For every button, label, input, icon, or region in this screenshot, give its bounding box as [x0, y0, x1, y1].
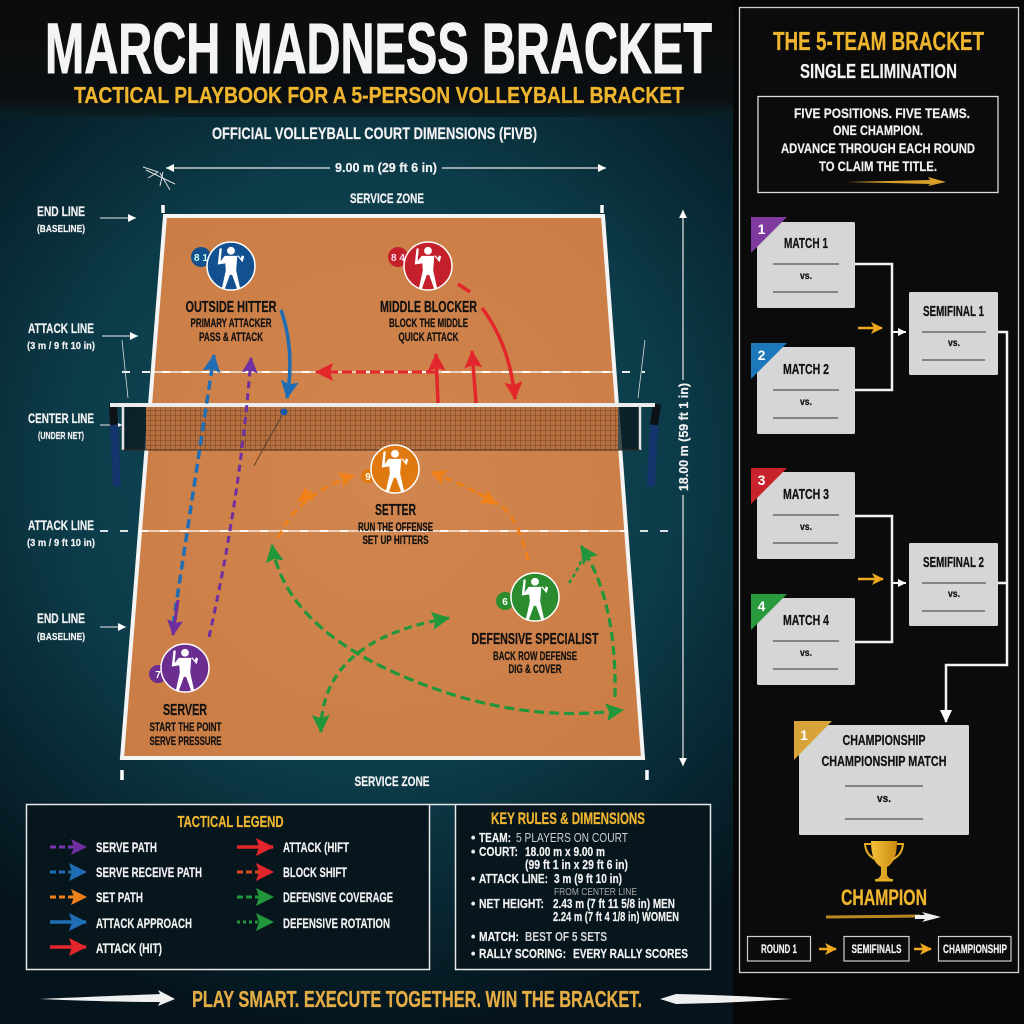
- rules text: 5 PLAYERS ON COURT: [516, 831, 628, 845]
- match 2 card: vs.: [800, 396, 812, 408]
- advance arrow one: [858, 327, 882, 329]
- semifinals tag: [844, 936, 909, 961]
- left line labels: END LINE: [37, 611, 85, 626]
- arrow: block shift: [316, 370, 436, 374]
- match 1 card: MATCH 1: [784, 235, 828, 252]
- player: defensive specialist: [472, 573, 599, 676]
- semifinal 2 card: vs.: [948, 588, 960, 600]
- player: outside hitter: PRIMARY ATTACKER: [190, 316, 272, 330]
- match 4 card: vs.: [800, 647, 812, 659]
- rules heading: KEY RULES & DIMENSIONS: [491, 809, 645, 828]
- player: setter: SETTER: [375, 502, 416, 519]
- championship card: CHAMPIONSHIP MATCH: [822, 753, 946, 770]
- legend labels: ATTACK APPROACH: [96, 915, 192, 931]
- arrow: set path right: [431, 472, 528, 560]
- player: defensive specialist: DEFENSIVE SPECIALIST: [472, 631, 599, 648]
- arrow: set path left head: [298, 492, 312, 501]
- player: outside hitter: [186, 242, 277, 344]
- player: setter: SET UP HITTERS: [362, 533, 428, 547]
- rules text: •: [471, 872, 475, 886]
- service zone bottom label: SERVICE ZONE: [354, 773, 430, 789]
- semifinal 2 card: [909, 543, 998, 626]
- player: server: 7: [155, 670, 161, 681]
- rules text: 3 m (9 ft 10 in): [554, 872, 622, 886]
- rules text: BEST OF 5 SETS: [525, 930, 607, 944]
- rules text: •: [471, 897, 475, 911]
- player: middle blocker: [380, 242, 477, 344]
- panel: bracket frame: [740, 8, 1018, 972]
- rules text: TEAM:: [479, 831, 511, 845]
- left line labels: CENTER LINE: [28, 411, 94, 426]
- intro box: [758, 96, 998, 192]
- rules text: 18.00 m x 9.00 m: [525, 845, 605, 859]
- championship card: [794, 721, 969, 835]
- championship card: CHAMPIONSHIP: [842, 732, 926, 749]
- right panel background: [733, 0, 1024, 1024]
- match 3 card: vs.: [800, 521, 812, 533]
- left line labels: (BASELINE): [37, 223, 85, 235]
- semifinal 1 card: SEMIFINAL 1: [923, 303, 984, 320]
- player: defensive specialist: BACK ROW DEFENSE: [493, 649, 577, 663]
- player: outside hitter: 8 1: [194, 253, 208, 264]
- legend keys: [50, 847, 273, 947]
- footer left brush arrow: [40, 990, 175, 1006]
- left line labels: (BASELINE): [37, 631, 85, 643]
- player: server: SERVE PRESSURE: [150, 734, 222, 748]
- title: MARCH MADNESS BRACKET: [45, 10, 712, 89]
- rules text: NET HEIGHT:: [479, 897, 544, 911]
- arrow: serve receive path: [173, 355, 214, 625]
- header band: [0, 0, 733, 117]
- championship tag: [938, 936, 1011, 961]
- arrow: defensive rotation short: [569, 552, 585, 583]
- brush arrow: [845, 177, 946, 186]
- semifinal 2 card: SEMIFINAL 2: [923, 554, 984, 571]
- net: [110, 404, 657, 486]
- bracket connectors: [855, 264, 1007, 722]
- left line labels: END LINE: [37, 204, 85, 219]
- left line labels: ATTACK LINE: [28, 518, 94, 533]
- legend labels: ATTACK (HIT): [96, 940, 162, 956]
- player: middle blocker: 8 4: [391, 253, 405, 264]
- tactical arrows: [173, 284, 623, 732]
- arrow: set path left: [278, 475, 354, 538]
- ball: [280, 408, 288, 416]
- arrow: attack hit one: [436, 354, 438, 403]
- player: server: START THE POINT: [150, 720, 222, 734]
- legend labels: SET PATH: [96, 889, 143, 905]
- court length dimension: 18.00 m (59 ft 1 in): [676, 383, 691, 491]
- player: outside hitter: PASS & ATTACK: [199, 330, 263, 344]
- player: setter: [358, 445, 433, 547]
- arrow: defensive rotation: [321, 618, 449, 732]
- rules text: (99 ft 1 in x 29 ft 6 in): [525, 858, 628, 872]
- player: middle blocker: MIDDLE BLOCKER: [380, 299, 477, 316]
- legend labels: DEFENSIVE ROTATION: [283, 915, 390, 931]
- subtitle: TACTICAL PLAYBOOK FOR A 5-PERSON VOLLEYBALL BRACKET: [74, 82, 684, 108]
- footer slogan: PLAY SMART. EXECUTE TOGETHER. WIN THE BRACKET.: [192, 986, 642, 1012]
- arrow: set path right head: [478, 493, 496, 504]
- player: middle blocker: BLOCK THE MIDDLE: [389, 316, 468, 330]
- match 1 card: [751, 217, 855, 308]
- icon: trophy: [865, 841, 903, 882]
- player: server: SERVER: [163, 702, 207, 719]
- champion brush arrow: [826, 912, 941, 922]
- player: middle blocker: QUICK ATTACK: [398, 330, 459, 344]
- net rope scribble: [143, 167, 175, 190]
- rules text: ATTACK LINE:: [479, 872, 548, 886]
- left line labels: ATTACK LINE: [28, 321, 94, 336]
- legend labels: DEFENSIVE COVERAGE: [283, 889, 393, 905]
- player: outside hitter: OUTSIDE HITTER: [186, 299, 277, 316]
- intro box: TO CLAIM THE TITLE.: [819, 158, 937, 174]
- match 4 card: MATCH 4: [783, 612, 829, 629]
- match 3 card: MATCH 3: [783, 486, 829, 503]
- rules text: EVERY RALLY SCORES: [573, 947, 688, 961]
- rules text: •: [471, 930, 475, 944]
- match 2 card: MATCH 2: [783, 361, 829, 378]
- arrow: defensive coverage long: [272, 545, 623, 713]
- semifinals tag: SEMIFINALS: [852, 942, 902, 956]
- court dimensions heading: OFFICIAL VOLLEYBALL COURT DIMENSIONS (FIVB): [212, 124, 537, 143]
- rules text: RALLY SCORING:: [479, 947, 566, 961]
- rules text: [471, 831, 688, 961]
- round 1 tag: ROUND 1: [761, 942, 797, 956]
- rules text: 2.24 m (7 ft 4 1/8 in) WOMEN: [553, 910, 679, 924]
- rules text: MATCH:: [479, 930, 519, 944]
- match 3 card: 3: [758, 472, 766, 488]
- match 3 card: [751, 468, 855, 559]
- arrow: serve path head: [173, 600, 178, 635]
- intro box: FIVE POSITIONS. FIVE TEAMS.: [794, 105, 970, 121]
- rules text: •: [471, 845, 475, 859]
- legend labels: BLOCK SHIFT: [283, 864, 347, 880]
- left line labels: [27, 204, 138, 643]
- arrow: defensive coverage right: [581, 546, 615, 697]
- rules text: •: [471, 831, 475, 845]
- semifinal 1 card: [909, 292, 998, 375]
- arrow to semifinals: [819, 948, 836, 950]
- left line labels: (3 m / 9 ft 10 in): [27, 537, 95, 549]
- player: setter: RUN THE OFFENSE: [358, 520, 433, 534]
- player: setter: 9: [365, 472, 371, 483]
- match 4 card: 4: [758, 598, 766, 614]
- court width dimension: 9.00 m (29 ft 6 in): [335, 160, 437, 175]
- player: server: [149, 644, 222, 748]
- arrow: serve path: [209, 358, 251, 637]
- rules text: 2.43 m (7 ft 11 5/8 in) MEN: [553, 897, 675, 911]
- rules text: COURT:: [479, 845, 518, 859]
- arrow: middle blocker approach: [458, 284, 515, 399]
- legend labels: [96, 839, 393, 956]
- match 1 card: 1: [758, 221, 766, 237]
- championship card: 1: [800, 727, 808, 743]
- bracket subheading: SINGLE ELIMINATION: [800, 61, 957, 83]
- panel: key rules and dimensions: [456, 804, 710, 970]
- round 1 tag: [748, 936, 810, 961]
- legend heading: TACTICAL LEGEND: [178, 814, 284, 831]
- legend labels: SERVE PATH: [96, 839, 157, 855]
- match 2 card: [751, 343, 855, 434]
- semifinal 1 card: vs.: [948, 337, 960, 349]
- match 1 card: vs.: [800, 270, 812, 282]
- match 4 card: [751, 594, 855, 685]
- intro box: ONE CHAMPION.: [833, 122, 923, 138]
- champion label: CHAMPION: [841, 885, 927, 910]
- arrow: attack hit two: [472, 351, 476, 403]
- player: defensive specialist: 6: [502, 597, 508, 608]
- player: defensive specialist: DIG & COVER: [508, 662, 562, 676]
- panel: tactical legend: [26, 804, 455, 970]
- footer right brush stroke: [660, 994, 792, 1004]
- left line labels: (3 m / 9 ft 10 in): [27, 340, 95, 352]
- legend labels: SERVE RECEIVE PATH: [96, 864, 202, 880]
- arrow: attack approach: [281, 310, 290, 398]
- service zone top label: SERVICE ZONE: [350, 190, 424, 206]
- left panel background: [0, 0, 736, 1024]
- legend labels: ATTACK (HIFT: [283, 839, 349, 855]
- rules text: •: [471, 947, 475, 961]
- arrow to championship: [914, 948, 931, 950]
- match 2 card: 2: [758, 347, 766, 363]
- rules text: FROM CENTER LINE: [554, 886, 637, 898]
- left line labels: (UNDER NET): [38, 430, 84, 442]
- intro box: ADVANCE THROUGH EACH ROUND: [781, 140, 975, 156]
- championship card: vs.: [877, 793, 891, 805]
- volleyball court: [100, 205, 670, 780]
- advance arrow two: [858, 578, 883, 580]
